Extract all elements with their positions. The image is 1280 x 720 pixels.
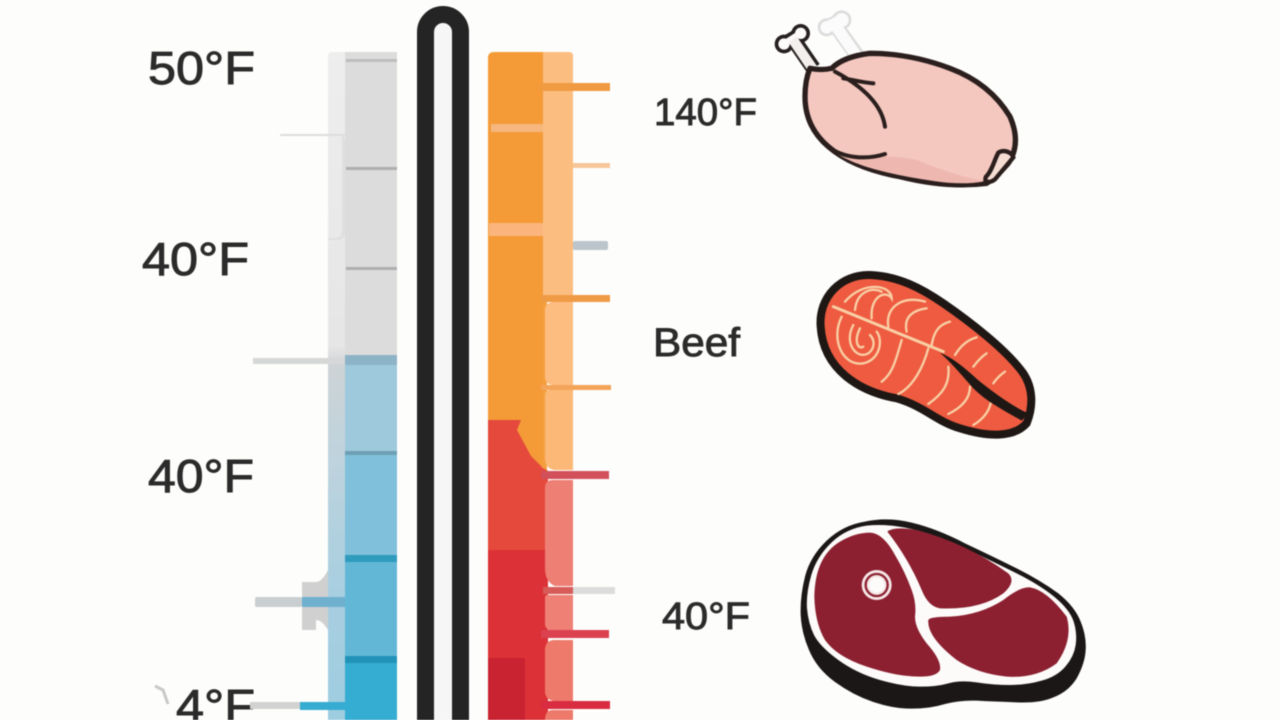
right label: 140°F: 140°F — [654, 92, 757, 134]
right hot scale — [488, 52, 615, 720]
icon: beef steak — [801, 519, 1086, 709]
salmon dark slit — [940, 353, 1028, 421]
heading label: upper 40°F: 40°F — [142, 233, 249, 285]
cold scale main column — [345, 52, 397, 720]
chicken lower shading — [832, 150, 984, 183]
heading label: 50°F: 50°F — [148, 42, 255, 94]
steak dark rim — [801, 519, 1086, 709]
front bone — [775, 24, 814, 71]
icon: salmon steak — [821, 275, 1031, 435]
steak top muscle — [887, 528, 1012, 608]
small faded mark near 4°F — [155, 686, 168, 704]
left cold scale — [250, 52, 397, 720]
heading label: lower 40°F: 40°F — [148, 450, 254, 502]
right label: Beef: Beef — [653, 321, 741, 365]
right label: 40°F: 40°F — [662, 596, 750, 638]
hot scale main column — [488, 52, 548, 720]
salmon fat lines — [833, 287, 1005, 425]
leg crease lines — [828, 72, 885, 157]
hot scale light strip — [543, 52, 573, 720]
cold scale tick marks — [250, 59, 397, 710]
icon: chicken — [775, 10, 1015, 185]
steak left muscle — [814, 533, 940, 677]
chicken body — [805, 53, 1015, 185]
cold scale outer strip — [302, 52, 346, 720]
salmon flesh — [821, 275, 1031, 435]
steak bone marrow ring — [862, 570, 892, 600]
faded back bone — [818, 10, 858, 58]
steak white fat — [807, 525, 1076, 687]
hot scale tick marks — [541, 83, 615, 709]
chicken tail — [985, 151, 1013, 182]
steak right muscle — [928, 587, 1069, 677]
central thermometer tube — [426, 14, 460, 720]
